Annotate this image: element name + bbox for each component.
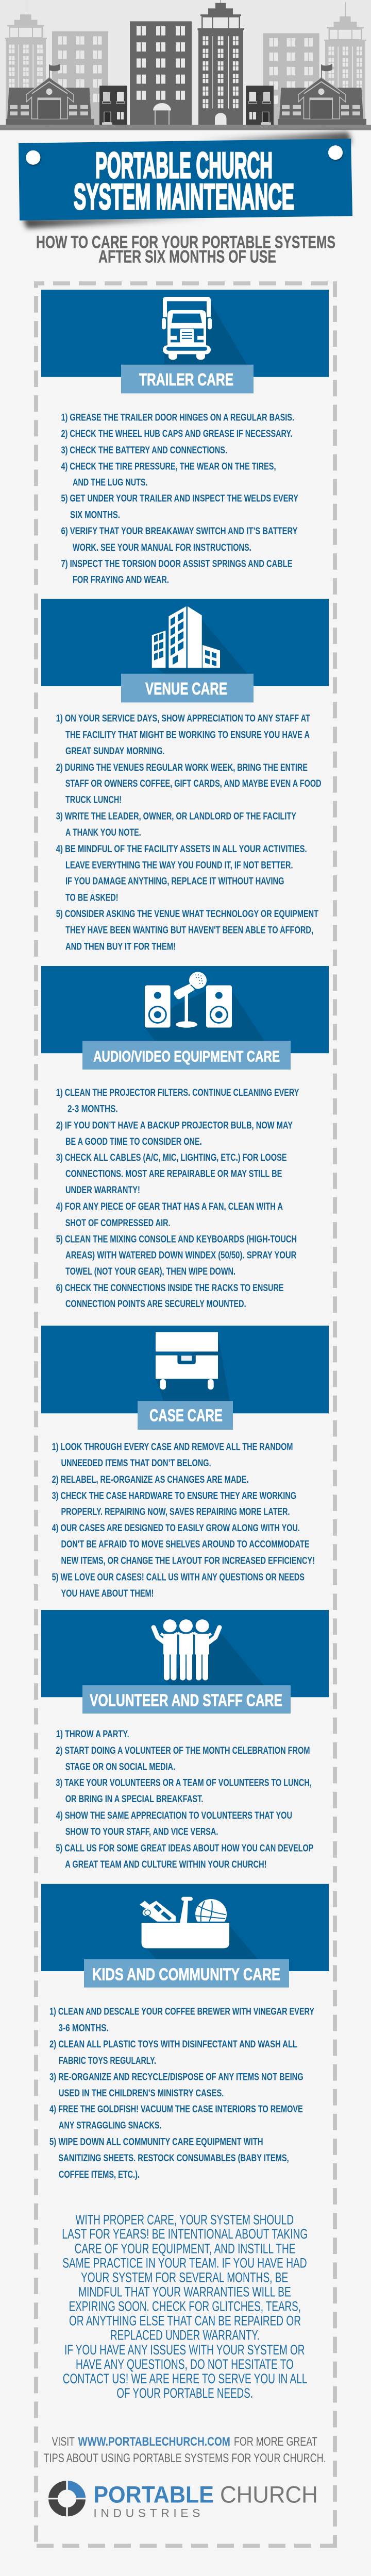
checklist: audio/video equipment care: BE A GOOD TIME TO CONSIDER ONE. — [65, 1136, 202, 1147]
checklist: audio/video equipment care: 6) CHECK THE CONNECTIONS INSIDE THE RACKS TO ENSURE — [56, 1282, 284, 1294]
section label: kids and community care: KIDS AND COMMUNITY CARE — [92, 1965, 280, 1984]
checklist: kids and community care: ANY STRAGGLING SNACKS. — [59, 2120, 162, 2131]
logo: Portable Church Industries: PORTABLE — [93, 2481, 214, 2507]
icon: truck — [162, 297, 247, 365]
checklist: venue care: AND THEN BUY IT FOR THEM! — [65, 941, 176, 952]
case header background — [41, 1326, 329, 1413]
checklist: case care: UNNEEDED ITEMS THAT DON’T BELONG. — [61, 1458, 211, 1469]
checklist: audio/video equipment care: 4) FOR ANY PIECE OF GEAR THAT HAS A FAN, CLEAN WITH A — [56, 1201, 283, 1212]
checklist: venue care: GREAT SUNDAY MORNING. — [65, 745, 165, 757]
checklist: venue care: TO BE ASKED! — [65, 892, 119, 903]
checklist: volunteer and staff care: STAGE OR ON SOCIAL MEDIA. — [65, 1761, 175, 1772]
section label: kids and community care — [84, 1959, 289, 1988]
checklist: trailer care: AND THE LUG NUTS. — [73, 477, 148, 488]
toy car — [140, 1901, 176, 1922]
panel: venue care — [41, 599, 329, 952]
checklist: audio/video equipment care: 2-3 MONTHS. — [68, 1104, 118, 1115]
title banner — [19, 132, 352, 228]
checklist: kids and community care: 3-6 MONTHS. — [58, 2023, 109, 2033]
checklist: kids and community care: SANITIZING SHEETS. RESTOCK CONSUMABLES (BABY ITEMS, — [58, 2153, 289, 2164]
checklist: trailer care: WORK. SEE YOUR MANUAL FOR INSTRUCTIONS. — [73, 542, 251, 553]
checklist: volunteer and staff care: SHOW TO YOUR STAFF, AND VICE VERSA. — [65, 1826, 218, 1837]
logo: Portable Church Industries: INDUSTRIES — [93, 2507, 200, 2519]
checklist: audio/video equipment care: CONNECTIONS. MOST ARE REPAIRABLE OR MAY STILL BE — [65, 1168, 282, 1180]
checklist: audio/video equipment care: UNDER WARRANTY! — [65, 1184, 140, 1196]
panel: kids and community care — [41, 1884, 329, 2180]
panel: audio/video equipment care — [41, 966, 329, 1310]
checklist: volunteer and staff care — [56, 1728, 313, 1870]
section label: venue care — [121, 674, 254, 702]
checklist: kids and community care — [49, 2006, 314, 2180]
checklist: venue care — [56, 713, 322, 952]
checklist: kids and community care: COFFEE ITEMS, ETC.). — [59, 2169, 140, 2180]
checklist: audio/video equipment care: TOWEL (NOT YOUR GEAR), THEN WIPE DOWN. — [65, 1266, 235, 1277]
section label: case care: CASE CARE — [149, 1406, 223, 1425]
website call to action — [43, 2435, 326, 2465]
checklist: trailer care: SIX MONTHS. — [70, 510, 120, 520]
checklist: trailer care — [61, 412, 298, 585]
illustration: city skyline with churches — [0, 0, 371, 130]
logo ring mark — [46, 2479, 88, 2518]
audio/video header background — [41, 966, 329, 1053]
center apartment building — [130, 21, 192, 125]
panel: case care — [41, 1326, 329, 1599]
checklist: venue care: TRUCK LUNCH! — [65, 794, 122, 806]
website call to action: WWW.PORTABLECHURCH.COM — [78, 2435, 230, 2449]
checklist: trailer care: FOR FRAYING AND WEAR. — [73, 574, 169, 585]
section label: trailer care: TRAILER CARE — [139, 370, 233, 389]
section label: volunteer and staff care — [82, 1685, 291, 1714]
section label: venue care: VENUE CARE — [145, 680, 227, 699]
section label: volunteer and staff care: VOLUNTEER AND STAFF CARE — [90, 1691, 282, 1710]
checklist: case care: 2) RELABEL, RE-ORGANIZE AS CHANGES ARE MADE. — [52, 1474, 249, 1485]
checklist: audio/video equipment care: CONNECTION POINTS ARE SECURELY MOUNTED. — [65, 1299, 246, 1310]
checklist: trailer care: 3) CHECK THE BATTERY AND CONNECTIONS. — [61, 445, 227, 456]
section label: case care — [138, 1401, 233, 1430]
checklist: kids and community care: USED IN THE CHILDREN’S MINISTRY CASES. — [59, 2088, 224, 2099]
closing paragraph: REPLACED UNDER WARRANTY. — [110, 2327, 260, 2343]
checklist: venue care: IF YOU DAMAGE ANYTHING, REPLACE IT WITHOUT HAVING — [65, 876, 284, 887]
icon: speakers and microphone — [145, 972, 264, 1041]
panel: volunteer and staff care — [41, 1610, 329, 1870]
volunteer header background — [41, 1610, 329, 1697]
checklist: trailer care: 4) CHECK THE TIRE PRESSURE, THE WEAR ON THE TIRES, — [61, 461, 276, 472]
venue header background — [41, 599, 329, 686]
checklist: kids and community care: 5) WIPE DOWN ALL COMMUNITY CARE EQUIPMENT WITH — [49, 2137, 263, 2147]
checklist: kids and community care: FABRIC TOYS REGULARLY. — [59, 2055, 156, 2066]
title text — [74, 145, 294, 217]
website call to action: VISIT — [52, 2435, 75, 2449]
closing paragraph — [62, 2212, 308, 2401]
closing paragraph: YOUR SYSTEM FOR SEVERAL MONTHS, BE — [81, 2269, 288, 2285]
trailer header background — [41, 290, 329, 377]
website call to action: FOR MORE GREAT — [234, 2435, 317, 2449]
logo: Portable Church Industries: CHURCH — [220, 2481, 318, 2507]
subtitle: AFTER SIX MONTHS OF USE — [98, 247, 276, 266]
center tower — [197, 0, 244, 125]
checklist: audio/video equipment care: 3) CHECK ALL CABLES (A/C, MIC, LIGHTING, ETC.) FOR LOOSE — [56, 1152, 287, 1163]
panel: trailer care — [41, 290, 329, 585]
closing paragraph: OF YOUR PORTABLE NEEDS. — [116, 2385, 253, 2401]
logo: Portable Church Industries — [46, 2479, 318, 2519]
checklist: volunteer and staff care: OR BRING IN A SPECIAL BREAKFAST. — [65, 1793, 203, 1805]
subtitle — [36, 232, 335, 266]
icon: three people — [154, 1619, 264, 1685]
checklist: case care — [52, 1442, 315, 1599]
section label: audio/video equipment care: AUDIO/VIDEO EQUIPMENT CARE — [93, 1048, 280, 1065]
checklist: venue care: A THANK YOU NOTE. — [65, 827, 141, 838]
checklist: volunteer and staff care: 1) THROW A PARTY. — [56, 1728, 129, 1740]
checklist: audio/video equipment care — [56, 1087, 299, 1310]
checklist: volunteer and staff care: A GREAT TEAM AND CULTURE WITHIN YOUR CHURCH! — [65, 1859, 267, 1870]
section label: trailer care — [121, 365, 254, 393]
checklist: case care: YOU HAVE ABOUT THEM! — [61, 1588, 154, 1599]
checklist: audio/video equipment care: SHOT OF COMPRESSED AIR. — [65, 1217, 171, 1229]
kids header background — [41, 1884, 329, 1971]
icon: toy basket — [140, 1897, 258, 1959]
icon: buildings — [152, 606, 247, 674]
section label: audio/video equipment care — [82, 1041, 291, 1070]
icon: road case — [156, 1332, 230, 1401]
